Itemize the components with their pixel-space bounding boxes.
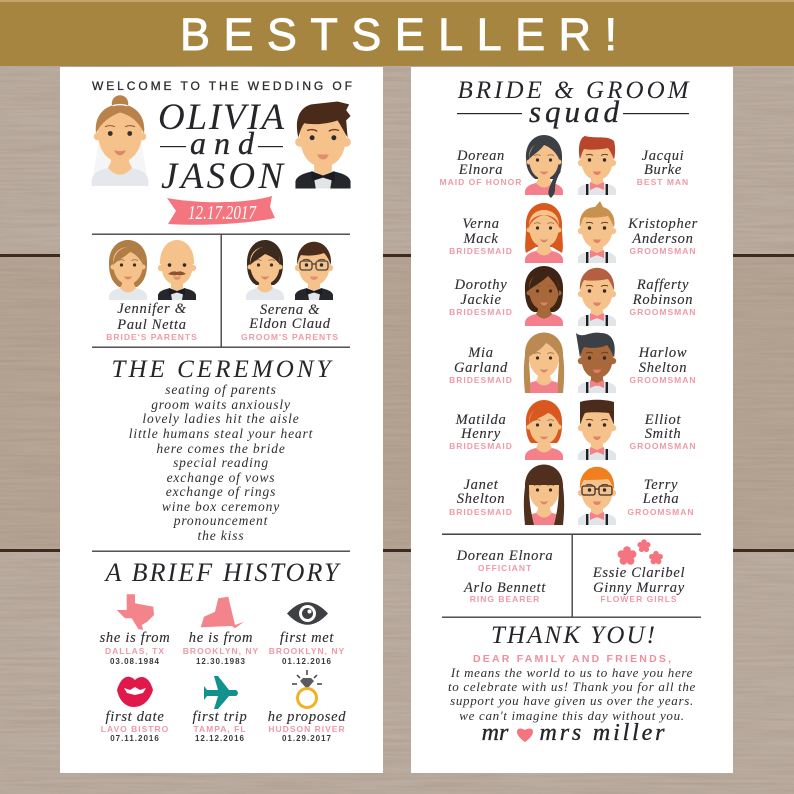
heading: a brief history: A BRIEF HISTORY (104, 558, 341, 587)
squad name: Janet (449, 477, 513, 517)
parents name: Serena and Eldon (241, 302, 339, 342)
squad name: Elliot: Elliot (644, 412, 681, 428)
heading: the ceremony: THE CEREMONY (112, 356, 334, 383)
heading: thank you: THANK YOU! (491, 622, 655, 649)
squad name: Matilda: Matilda (455, 412, 506, 428)
thank you message: we can't imagine this day without you. (459, 708, 685, 723)
squad name: Dorean: Elnora (458, 162, 503, 178)
icon: New York (201, 597, 244, 628)
avatar: Harlow (576, 333, 616, 393)
avatar: Kristopher (578, 201, 616, 263)
signature: mr (482, 720, 509, 746)
icon: eye (287, 602, 328, 625)
history: first trip: 12.12.2016 (195, 734, 245, 743)
squad name: Kristopher: Kristopher (627, 216, 698, 232)
rule officiants vertical (572, 534, 573, 617)
thank you message (448, 665, 696, 723)
ceremony list: here comes the bride (156, 441, 286, 456)
ceremony list: special reading (173, 455, 269, 470)
ceremony list (129, 382, 314, 543)
squad name: Dorothy: Dorothy (454, 277, 507, 293)
history: he proposed: 01.29.2017 (282, 734, 332, 743)
avatar: groom (295, 102, 351, 188)
thank you message: to celebrate with us! Thank you for all the (448, 679, 696, 694)
squad name: Rafferty: Robinson (632, 292, 693, 308)
history: first date: LAVO BISTRO (101, 724, 169, 734)
squad name: Jacqui: Jacqui (642, 148, 684, 164)
history: he is from: he is from (189, 630, 253, 646)
squad name: Verna: BRIDESMAID (449, 246, 513, 256)
squad name: Kristopher: GROOMSMAN (629, 246, 697, 256)
parents name: Jennifer and Paul: Paul Netta (116, 317, 187, 333)
history: first trip (193, 709, 247, 743)
avatar: Elliot (578, 400, 616, 460)
icon: heart (517, 728, 533, 742)
couple name: and: and (190, 125, 255, 161)
squad name: Harlow (629, 345, 697, 385)
history: he is from: 12.30.1983 (196, 657, 246, 666)
history: he proposed (268, 709, 346, 743)
heading: welcome: WELCOME TO THE WEDDING OF (92, 79, 352, 93)
thank you message: It means the world to us to have you here (450, 665, 693, 680)
squad name: Janet: Janet (464, 477, 499, 493)
squad name: Elliot: GROOMSMAN (629, 441, 697, 451)
heading: squad: squad (529, 94, 620, 129)
ceremony list: seating of parents (165, 382, 277, 397)
label: groom's parents: GROOM'S PARENTS (241, 332, 339, 342)
rule bottom of parents (92, 346, 350, 348)
heading: bride and groom: BRIDE & GROOM (458, 77, 690, 104)
avatar: Serena (246, 240, 284, 300)
history: first met (269, 630, 345, 666)
avatar: Dorothy (525, 266, 563, 326)
avatar: Paul (158, 240, 196, 300)
squad name: Harlow: Harlow (638, 345, 687, 361)
squad name: Dorean (440, 148, 522, 187)
history: first trip: TAMPA, FL (193, 724, 247, 734)
squad name: Rafferty: GROOMSMAN (629, 307, 697, 317)
ceremony list: lovely ladies hit the aisle (142, 411, 300, 426)
avatar: Eldon (295, 242, 333, 300)
icon: ring (292, 670, 322, 708)
avatar: Terry (578, 467, 616, 525)
history: first date (101, 709, 169, 743)
avatar: Mia (524, 332, 564, 393)
icon: airplane (204, 676, 238, 709)
history: he is from (183, 630, 259, 666)
ceremony list: groom waits anxiously (151, 397, 291, 412)
avatar: Verna (525, 203, 563, 263)
history: he proposed: he proposed (268, 709, 346, 725)
officiant and ring bearer: RING BEARER (470, 594, 540, 604)
avatar: Janet (524, 464, 564, 525)
avatar: Rafferty (578, 268, 616, 326)
squad name: Matilda: Henry (460, 426, 501, 442)
avatar: Jennifer (109, 240, 147, 300)
avatar: bride (92, 95, 148, 186)
couple name: Jason: JASON (161, 156, 285, 197)
squad name: Matilda: BRIDESMAID (449, 441, 513, 451)
wedding date: 12.17.2017 (188, 202, 257, 224)
flower girls: FLOWER GIRLS (600, 594, 678, 604)
squad name: Terry (627, 477, 695, 517)
label: bride's parents: BRIDE'S PARENTS (106, 332, 198, 342)
squad name: Harlow: GROOMSMAN (629, 375, 697, 385)
icon: Texas (117, 594, 154, 630)
history: first met: BROOKLYN, NY (269, 646, 345, 656)
squad name: Kristopher (627, 216, 698, 256)
officiant and ring bearer: Arlo Bennett (463, 580, 546, 596)
squad name: Janet: BRIDESMAID (449, 507, 513, 517)
avatar: Dorean (525, 135, 563, 198)
rule top of officiants (442, 534, 701, 535)
squad name: Mia (449, 345, 513, 385)
parents name: Serena and Eldon: Eldon Claud (248, 316, 331, 332)
squad name: Matilda (449, 412, 513, 451)
history: she is from (100, 630, 170, 666)
squad name: Jacqui (637, 148, 689, 187)
squad name: Verna (449, 216, 513, 256)
rule squad left (457, 113, 522, 114)
squad name: Elliot: Smith (645, 426, 681, 442)
squad name: Jacqui: Burke (644, 162, 682, 178)
ceremony list: wine box ceremony (162, 499, 280, 514)
ceremony list: pronouncement (173, 513, 269, 528)
rule squad right (623, 113, 689, 114)
and rule right (258, 146, 283, 147)
panel: left program card (60, 67, 383, 773)
squad name: Mia: Garland (454, 360, 508, 376)
ceremony list: the kiss (198, 528, 244, 543)
squad name: Dorothy (449, 277, 513, 317)
parents name: Jennifer and Paul: Jennifer & (117, 301, 187, 317)
squad name: Mia: Mia (467, 345, 494, 361)
history: she is from: she is from (100, 630, 170, 646)
squad name: Rafferty: Rafferty (636, 277, 689, 293)
history: first trip: first trip (193, 709, 247, 725)
date ribbon (167, 196, 275, 225)
avatar: Jacqui (578, 136, 616, 195)
squad name: Dorothy: Jackie (460, 292, 502, 308)
greeting: DEAR FAMILY AND FRIENDS, (473, 653, 671, 665)
squad name: Verna: Verna (462, 216, 500, 232)
flower girls: Essie Claribel (592, 565, 685, 581)
squad name: Dorothy: BRIDESMAID (449, 307, 513, 317)
rule parents vertical (220, 234, 222, 347)
squad name: Terry: Terry (644, 477, 678, 493)
banner: bestseller (0, 0, 794, 66)
squad name: Verna: Mack (462, 231, 499, 247)
squad name: Kristopher: Anderson (631, 231, 694, 247)
rule bottom of officiants (442, 616, 701, 618)
squad name: Harlow: Shelton (639, 360, 687, 376)
rule above history (92, 550, 350, 552)
icon: lips (117, 677, 153, 707)
rule top of parents (92, 234, 350, 235)
squad name: Terry: Letha (642, 491, 679, 507)
panel: right program card (411, 67, 733, 773)
parents name: Serena and Eldon: Serena & (260, 302, 320, 318)
ceremony list: exchange of vows (167, 470, 275, 485)
history: first met: 01.12.2016 (282, 657, 332, 666)
squad name: Rafferty (629, 277, 697, 317)
officiant and ring bearer: OFFICIANT (478, 563, 532, 573)
banner title: BESTSELLER! (180, 9, 617, 60)
squad name: Dorean: MAID OF HONOR (440, 177, 522, 187)
squad name: Mia: BRIDESMAID (449, 375, 513, 385)
history: she is from: DALLAS, TX (105, 646, 165, 656)
signature (482, 720, 665, 746)
history: he is from: BROOKLYN, NY (183, 646, 259, 656)
ceremony list: little humans steal your heart (129, 426, 314, 441)
history: he proposed: HUDSON RIVER (268, 724, 346, 734)
signature: mrs miller (540, 720, 665, 746)
flower girls: Ginny Murray (593, 580, 685, 596)
avatar: Matilda (525, 400, 563, 460)
history: first date: first date (106, 709, 164, 725)
squad name: Janet: Shelton (457, 491, 505, 507)
flower girls (592, 565, 685, 604)
officiant and ring bearer (456, 548, 553, 604)
couple name: Olivia: OLIVIA (158, 97, 284, 138)
squad name: Jacqui: BEST MAN (637, 177, 689, 187)
icon: flowers (618, 539, 663, 565)
squad name: Dorean: Dorean (456, 148, 505, 164)
and rule left (160, 146, 186, 147)
history: she is from: 03.08.1984 (110, 657, 160, 666)
parents name: Jennifer and Paul (106, 301, 198, 342)
thank you message: support you have given us over the years. (450, 693, 694, 708)
officiant and ring bearer: Dorean Elnora (456, 548, 553, 564)
history: first date: 07.11.2016 (110, 734, 160, 743)
squad name: Elliot (629, 412, 697, 451)
squad name: Terry: GROOMSMAN (627, 507, 695, 517)
ceremony list: exchange of rings (166, 484, 276, 499)
history: first met: first met (280, 630, 334, 646)
